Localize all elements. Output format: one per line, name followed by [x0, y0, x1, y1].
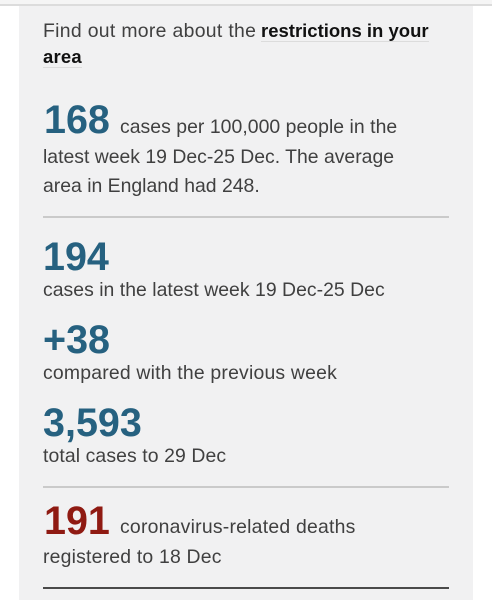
- stat: cases per 100,000: cases per 100,000 people in the: [120, 116, 397, 138]
- stat: weekly cases: 194: [43, 235, 109, 279]
- stat: deaths: coronavirus-related deaths: [120, 516, 356, 538]
- stat: deaths: registered to 18 Dec: [43, 546, 222, 568]
- stat: total cases: 3,593: [43, 401, 142, 445]
- intro text with link: Find out more about the: [43, 20, 256, 42]
- stat: cases per 100,000: area in England had 248.: [43, 175, 260, 197]
- stat: weekly cases: [43, 235, 385, 301]
- stat: total cases: total cases to 29 Dec: [43, 445, 226, 467]
- stat: total cases: [43, 401, 226, 467]
- top bar: [0, 0, 492, 6]
- stat: weekly cases: cases in the latest week 19 Dec-25 Dec: [43, 279, 385, 301]
- stat: cases per 100,000: latest week 19 Dec-25 Dec. The average: [43, 146, 394, 168]
- stat: cases per 100,000: [43, 98, 397, 197]
- stat: deaths: [43, 499, 356, 568]
- stat: weekly change: [43, 318, 337, 384]
- intro text with link: [43, 20, 429, 68]
- stat: weekly change: compared with the previous week: [43, 362, 337, 384]
- intro text with link: area: [43, 46, 82, 67]
- intro text with link: restrictions in your: [261, 20, 429, 41]
- stat: cases per 100,000: 168: [44, 98, 110, 142]
- stat: weekly change: +38: [43, 318, 110, 362]
- stat: deaths: 191: [44, 499, 110, 543]
